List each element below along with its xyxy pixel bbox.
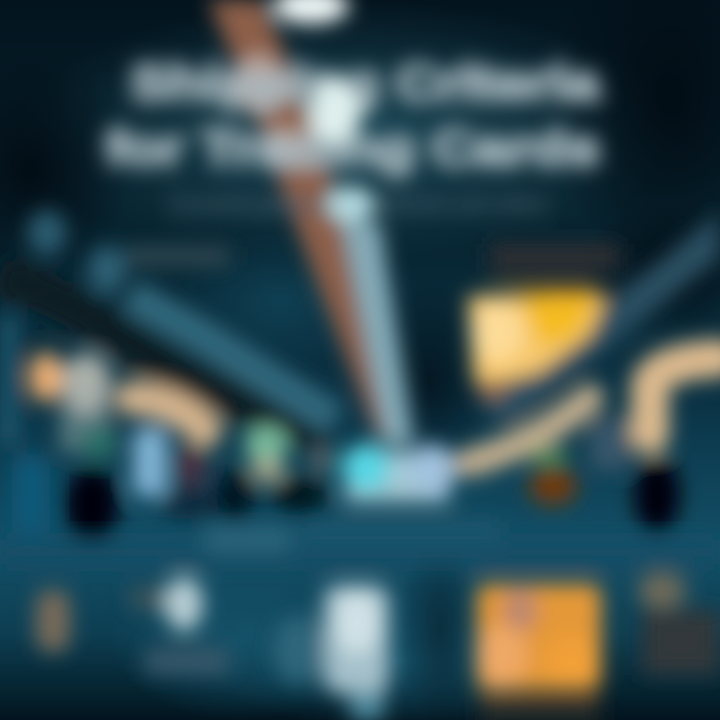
title: for Trading Cards xyxy=(105,120,600,176)
horizontal divider band xyxy=(0,522,720,564)
yellow panel xyxy=(468,284,612,402)
subtitle: Essential guidance for collectors and sellers xyxy=(170,191,550,218)
bottom small white tile xyxy=(128,577,203,631)
bottom muted label xyxy=(145,648,229,674)
light blue card xyxy=(133,428,167,496)
top light xyxy=(273,0,349,24)
bottom orange panel xyxy=(476,584,601,690)
subtitle glow dot xyxy=(327,186,375,222)
bottom white tall panel xyxy=(274,585,389,720)
green card xyxy=(244,426,335,482)
title highlight xyxy=(309,80,361,144)
right diagonal beam xyxy=(480,212,720,425)
dark silhouettes xyxy=(65,457,680,543)
maroon accent xyxy=(173,444,207,486)
brown and green object xyxy=(527,447,577,505)
central teal glow xyxy=(342,444,455,502)
blue left block xyxy=(12,455,50,535)
bottom right muted tile xyxy=(638,572,720,675)
tan curved beam xyxy=(468,398,590,463)
brown diagonal streak xyxy=(208,0,400,440)
left diagonal beams xyxy=(0,210,335,445)
faint label left xyxy=(125,246,230,266)
pale blue vertical streak xyxy=(342,222,414,445)
left warm figures xyxy=(29,352,205,458)
bottom left brown tile xyxy=(36,590,70,652)
bottom orange panel shadow xyxy=(480,698,600,720)
title: Shipping Criteria xyxy=(130,55,601,111)
title xyxy=(105,55,601,176)
faint label above yellow panel xyxy=(490,244,620,270)
right tan arch xyxy=(590,358,720,470)
